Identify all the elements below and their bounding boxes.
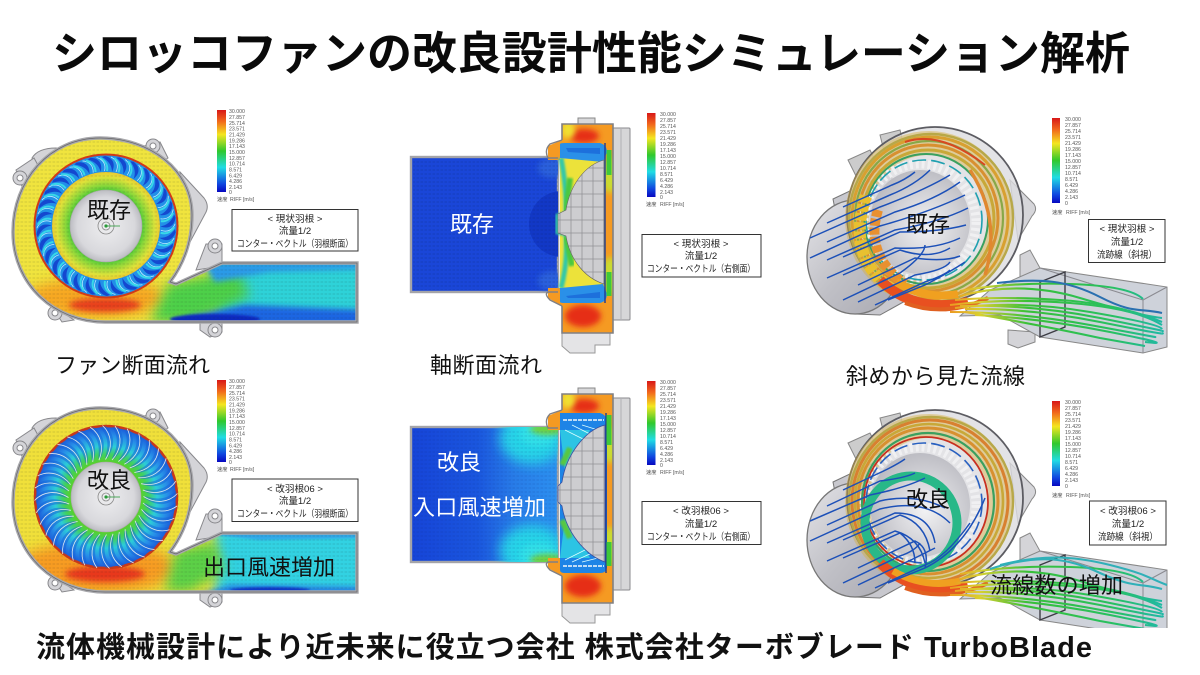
color legend: 2.143	[1065, 195, 1078, 201]
condition box: コンター・ベクトル（羽根断面）	[237, 508, 353, 520]
condition box: 流量1/2	[685, 518, 717, 530]
color legend: 23.571	[1065, 135, 1081, 141]
color legend: 速度	[217, 465, 227, 473]
inlet contour	[410, 426, 560, 564]
color legend: 19.286	[1065, 147, 1081, 153]
label: existing: 既存	[87, 198, 131, 223]
color legend: 2.143	[660, 458, 673, 464]
color legend: 0	[229, 460, 232, 466]
color legend: 4.286	[660, 452, 673, 458]
condition box	[1088, 220, 1165, 262]
color legend: 6.429	[229, 173, 242, 179]
color legend: 4.286	[1065, 472, 1078, 478]
color legend: 30.000	[229, 379, 245, 385]
color legend: 12.857	[229, 426, 245, 432]
streamlines: inlet	[810, 170, 968, 305]
housing and rotor	[545, 118, 630, 353]
rotor: improved blades	[33, 424, 179, 570]
color legend: 0	[660, 463, 663, 469]
color legend: 4.286	[660, 184, 673, 190]
color legend: 17.143	[1065, 436, 1081, 442]
condition box: 流量1/2	[685, 250, 717, 262]
streamlines: outlet	[950, 281, 1163, 346]
color legend: RIFF [m/s]	[1066, 210, 1091, 216]
condition box: < 現状羽根 >	[268, 213, 323, 225]
color legend: 8.571	[1065, 460, 1078, 466]
label: improved: 改良	[87, 468, 131, 493]
color legend: 15.000	[229, 150, 245, 156]
color legend: 8.571	[229, 168, 242, 174]
color legend: 19.286	[229, 138, 245, 144]
color legend: RIFF [m/s]	[230, 197, 255, 203]
color legend: 8.571	[660, 440, 673, 446]
color legend: 15.000	[660, 422, 676, 428]
color legend: 速度	[646, 468, 656, 476]
color legend	[217, 109, 255, 203]
condition box	[1090, 501, 1166, 545]
condition box	[642, 234, 761, 277]
color legend: 10.714	[660, 166, 676, 172]
caption: ファン断面流れ	[55, 353, 210, 378]
color legend: 25.714	[660, 124, 676, 130]
color legend: 速度	[1052, 208, 1062, 216]
color legend: 6.429	[1065, 183, 1078, 189]
condition box: < 現状羽根 >	[1100, 223, 1155, 235]
color legend: 17.143	[229, 144, 245, 150]
color legend: 10.714	[229, 162, 245, 168]
color legend: 4.286	[1065, 189, 1078, 195]
fan casing with contour	[0, 130, 375, 337]
color legend: 12.857	[1065, 165, 1081, 171]
label: improved: 改良	[906, 487, 950, 512]
condition box: < 改羽根06 >	[673, 505, 729, 517]
color legend: 12.857	[229, 156, 245, 162]
color legend: 23.571	[229, 127, 245, 133]
color legend: RIFF [m/s]	[660, 470, 685, 476]
color legend: 12.857	[660, 160, 676, 166]
condition box: 流量1/2	[1112, 518, 1144, 530]
footer text: 流体機械設計により近未来に役立つ会社 株式会社ターボブレード TurboBlade	[36, 630, 1092, 664]
color legend: 速度	[217, 195, 227, 203]
panel: existing axial section flow	[411, 112, 761, 378]
condition box: < 現状羽根 >	[674, 238, 729, 250]
condition box	[642, 502, 761, 544]
color legend: 4.286	[229, 179, 242, 185]
panel: existing fan cross-section flow	[0, 109, 375, 378]
condition box: コンター・ベクトル（右側面）	[647, 263, 755, 275]
title: シロッコファンの改良設計性能シミュレーション解析	[52, 28, 1130, 79]
footer band	[0, 628, 1200, 675]
color legend: 27.857	[1065, 406, 1081, 412]
color legend: 27.857	[229, 115, 245, 121]
color legend: 10.714	[1065, 171, 1081, 177]
color legend: 25.714	[229, 121, 245, 127]
label: existing: 既存	[450, 212, 494, 237]
condition box: 流量1/2	[279, 495, 311, 507]
streamlines: swirl rings	[849, 417, 1013, 594]
color legend: 23.571	[660, 130, 676, 136]
streamlines: outlet	[950, 558, 1167, 629]
color legend: 0	[229, 190, 232, 196]
color legend: 17.143	[660, 416, 676, 422]
color legend: 25.714	[660, 392, 676, 398]
condition box: < 改羽根06 >	[1100, 505, 1156, 517]
color legend	[646, 112, 685, 208]
color legend: 0	[1065, 201, 1068, 207]
color legend: 30.000	[660, 380, 676, 386]
color legend: 12.857	[1065, 448, 1081, 454]
color legend: 12.857	[660, 428, 676, 434]
color legend: 15.000	[1065, 442, 1081, 448]
panel: existing oblique streamlines	[807, 117, 1167, 389]
color legend: 2.143	[1065, 478, 1078, 484]
color legend	[1052, 400, 1091, 499]
color legend: 27.857	[1065, 123, 1081, 129]
color legend: 30.000	[1065, 117, 1081, 123]
color legend	[1052, 117, 1091, 216]
fan casing with contour	[0, 400, 375, 607]
color legend: 25.714	[1065, 129, 1081, 135]
color legend: 0	[660, 195, 663, 201]
color legend: 17.143	[660, 148, 676, 154]
condition box: 流量1/2	[279, 225, 311, 237]
casing, inlet and duct	[807, 127, 1167, 353]
panel: improved fan cross-section flow	[0, 379, 375, 607]
color legend: 15.000	[229, 420, 245, 426]
color legend: 15.000	[660, 154, 676, 160]
color legend: 19.286	[660, 142, 676, 148]
color legend	[217, 379, 255, 473]
housing and rotor	[545, 388, 630, 623]
color legend: 27.857	[660, 118, 676, 124]
color legend: 30.000	[660, 112, 676, 118]
color legend	[646, 380, 685, 476]
color legend: 6.429	[660, 446, 673, 452]
color legend: 19.286	[660, 410, 676, 416]
color legend: 4.286	[229, 449, 242, 455]
color legend: 19.286	[229, 408, 245, 414]
color legend: 30.000	[229, 109, 245, 115]
color legend: 19.286	[1065, 430, 1081, 436]
color legend: 23.571	[1065, 418, 1081, 424]
condition box	[232, 479, 358, 522]
color legend: 15.000	[1065, 159, 1081, 165]
condition box: コンター・ベクトル（右側面）	[647, 531, 755, 543]
color legend: 17.143	[1065, 153, 1081, 159]
color legend: RIFF [m/s]	[1066, 493, 1091, 499]
condition box	[232, 210, 358, 251]
color legend: 10.714	[229, 432, 245, 438]
condition box: 流量1/2	[1111, 236, 1143, 248]
color legend: 8.571	[660, 172, 673, 178]
color legend: 21.429	[660, 404, 676, 410]
color legend: 8.571	[1065, 177, 1078, 183]
label: existing: 既存	[906, 212, 950, 237]
color legend: 8.571	[229, 438, 242, 444]
color legend: 2.143	[229, 185, 242, 191]
color legend: 27.857	[229, 385, 245, 391]
color legend: 6.429	[1065, 466, 1078, 472]
color legend: 25.714	[229, 391, 245, 397]
panel: improved oblique streamlines	[807, 400, 1167, 636]
color legend: 21.429	[229, 402, 245, 408]
color legend: 6.429	[660, 178, 673, 184]
condition box: 流跡線（斜視）	[1097, 249, 1157, 261]
color legend: 速度	[1052, 491, 1062, 499]
panel: improved axial section flow	[411, 380, 761, 623]
condition box: < 改羽根06 >	[267, 483, 323, 495]
color legend: 21.429	[229, 132, 245, 138]
label: inlet velocity increase: 入口風速増加	[413, 495, 546, 520]
color legend: RIFF [m/s]	[230, 467, 255, 473]
condition box: 流跡線（斜視）	[1098, 531, 1158, 543]
color legend: 30.000	[1065, 400, 1081, 406]
color legend: 25.714	[1065, 412, 1081, 418]
condition box: コンター・ベクトル（羽根断面）	[237, 238, 353, 250]
casing, inlet and duct	[807, 410, 1167, 636]
rotor: existing blades	[35, 155, 177, 297]
color legend: 27.857	[660, 386, 676, 392]
color legend: 21.429	[660, 136, 676, 142]
color legend: 10.714	[1065, 454, 1081, 460]
color legend: 6.429	[229, 443, 242, 449]
color legend: 2.143	[660, 190, 673, 196]
color legend: 速度	[646, 200, 656, 208]
inlet contour	[410, 156, 560, 294]
label: outlet velocity increase: 出口風速増加	[203, 555, 335, 580]
label: improved: 改良	[437, 450, 481, 475]
streamlines: swirl rings	[849, 134, 1013, 309]
color legend: 0	[1065, 484, 1068, 490]
color legend: 21.429	[1065, 424, 1081, 430]
caption: 軸断面流れ	[430, 353, 542, 378]
color legend: 23.571	[229, 397, 245, 403]
color legend: 10.714	[660, 434, 676, 440]
caption: 斜めから見た流線	[846, 364, 1025, 389]
color legend: 23.571	[660, 398, 676, 404]
label: more streamlines: 流線数の増加	[990, 573, 1123, 598]
color legend: 17.143	[229, 414, 245, 420]
color legend: 21.429	[1065, 141, 1081, 147]
streamlines: inlet	[810, 459, 985, 588]
color legend: 2.143	[229, 455, 242, 461]
color legend: RIFF [m/s]	[660, 202, 685, 208]
